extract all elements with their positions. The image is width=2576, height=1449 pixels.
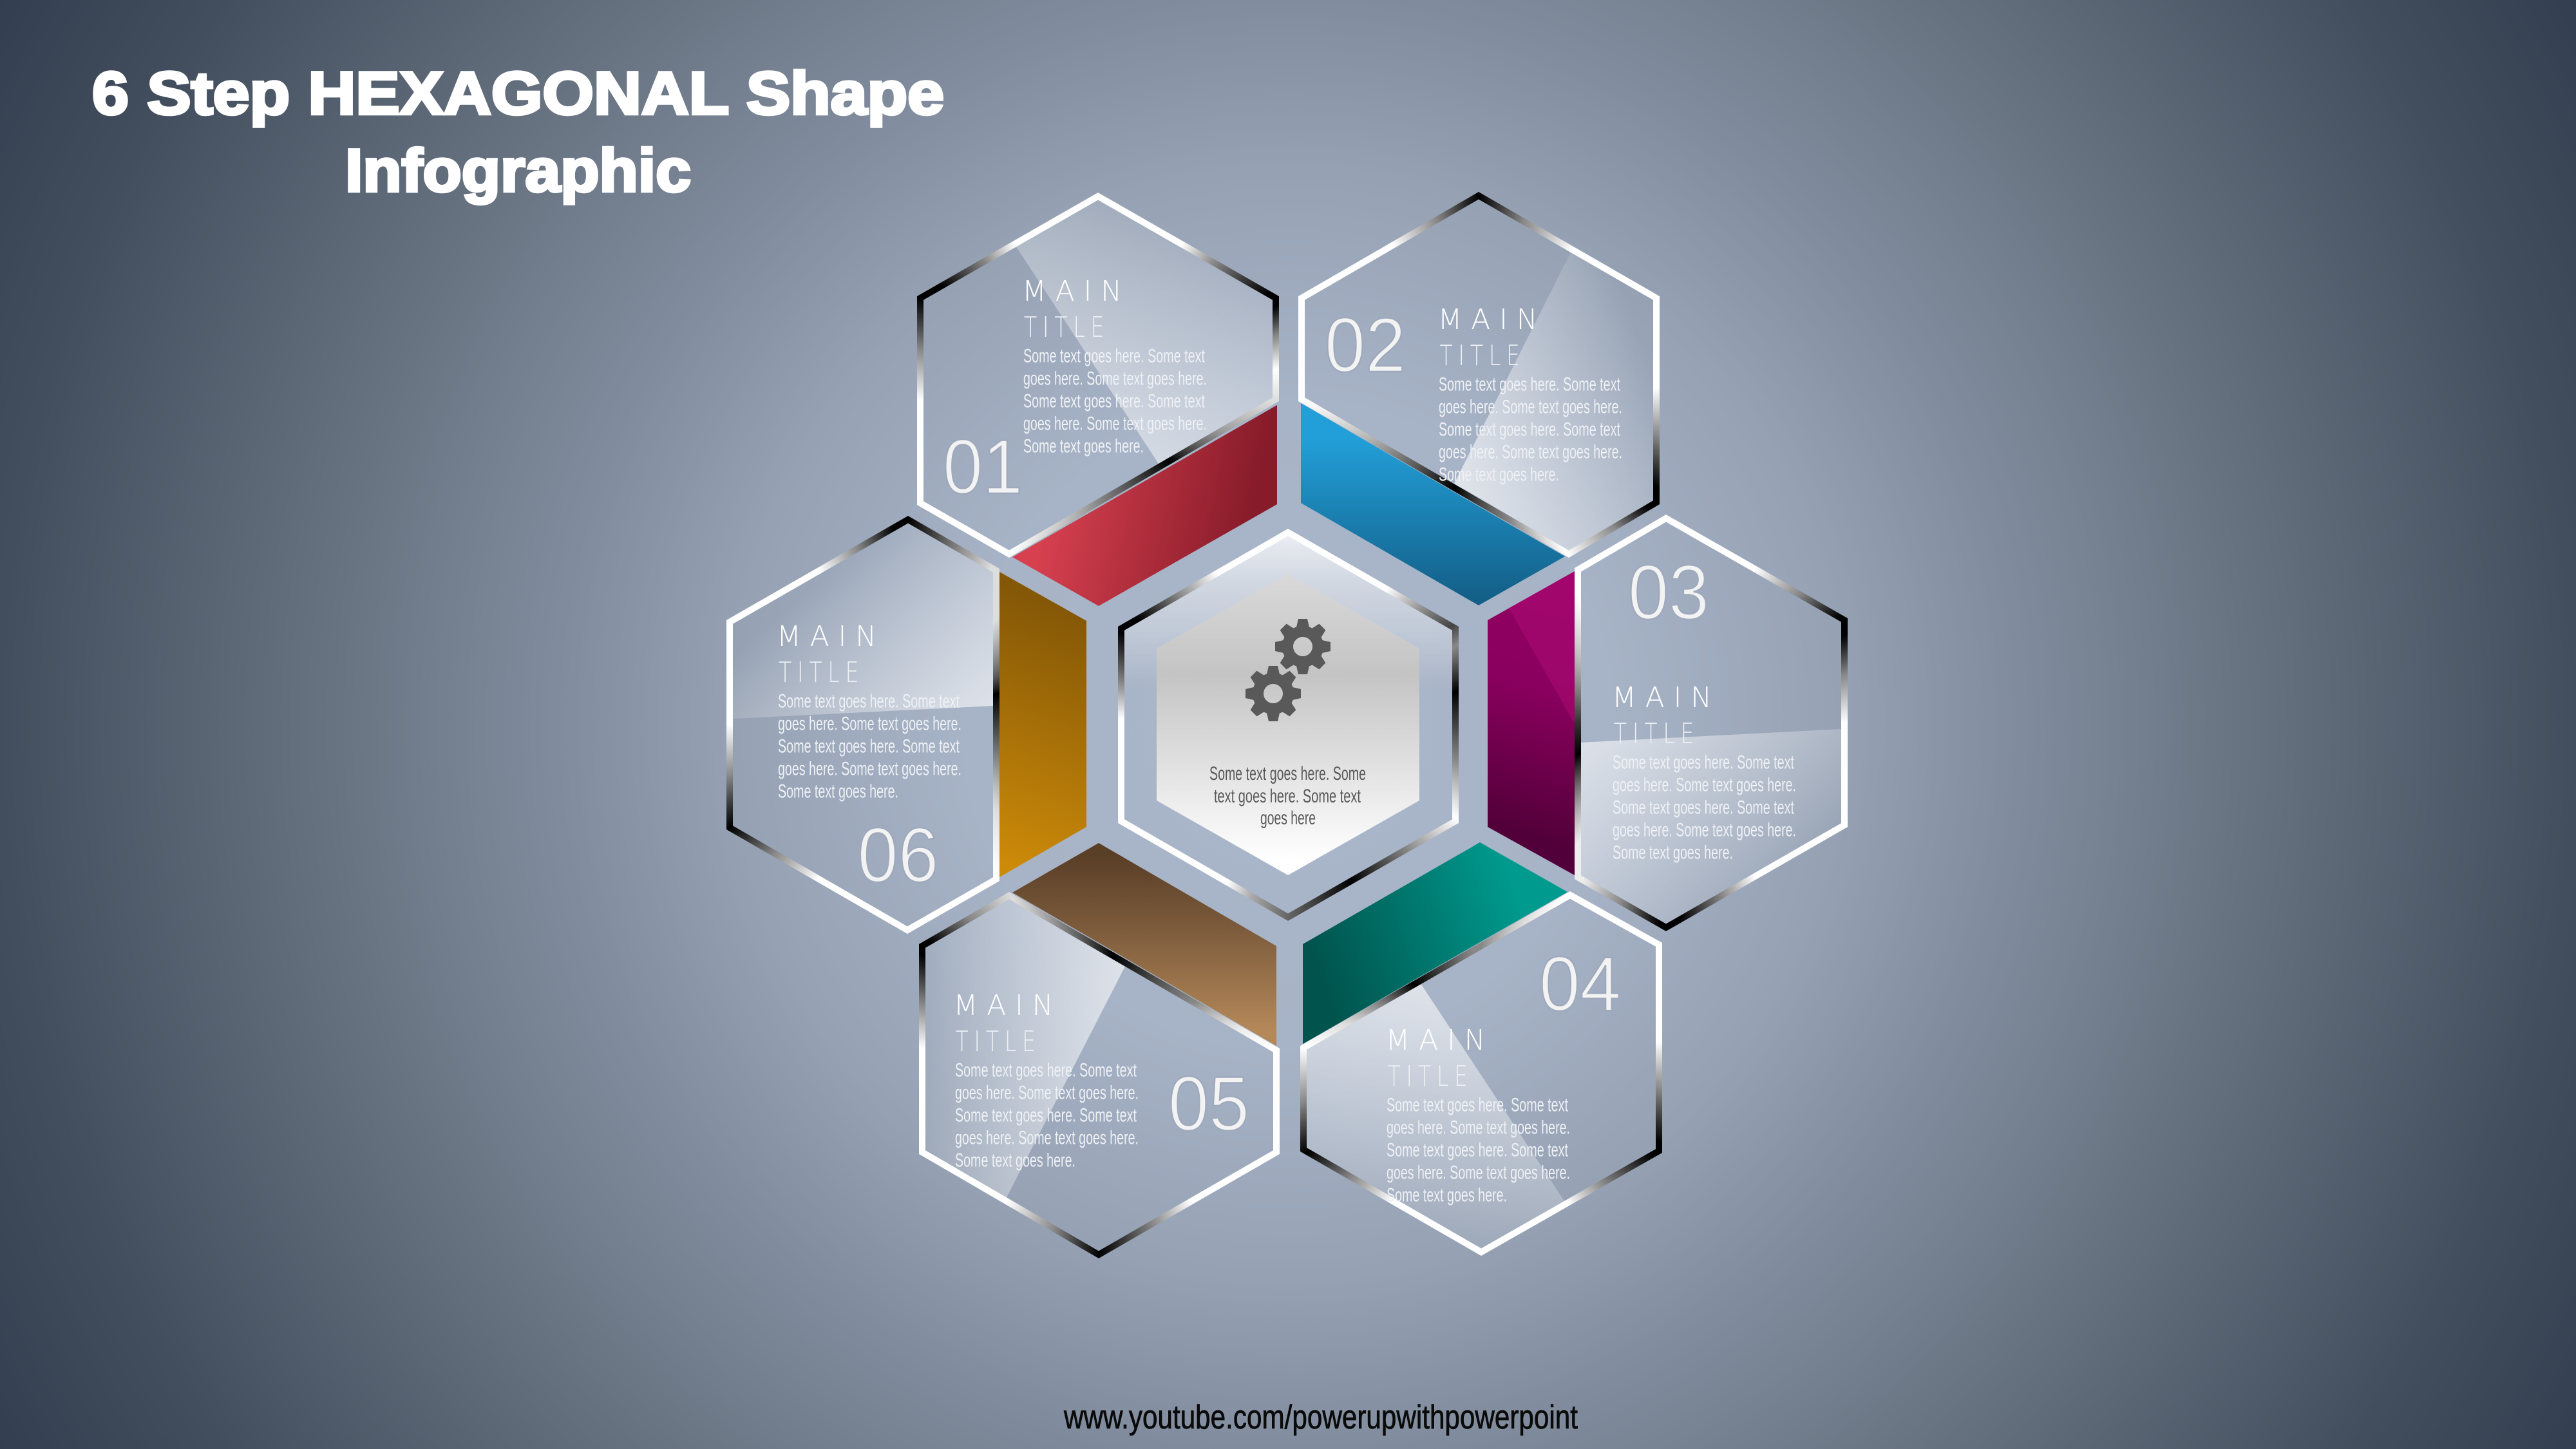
body text: goes here. Some text goes here. [778, 759, 961, 779]
body text: Some text goes here. Some text [1613, 797, 1794, 818]
icon: gears [1245, 619, 1331, 721]
panel: step 04 [1300, 891, 1662, 1256]
body text [1439, 374, 1622, 486]
body text: goes here. Some text goes here. [1439, 442, 1622, 462]
centre text: goes here [1260, 808, 1316, 829]
body text: goes here. Some text goes here. [1023, 413, 1207, 434]
body text: Some text goes here. Some text [1613, 752, 1794, 773]
body text: Some text goes here. Some text [778, 690, 960, 712]
metallic ring [726, 516, 999, 934]
body text: goes here. Some text goes here. [1387, 1117, 1570, 1139]
body text: Some text goes here. [1023, 435, 1144, 457]
body text: Some text goes here. Some text [1439, 374, 1620, 395]
body text: Some text goes here. [955, 1150, 1075, 1171]
centre text: text goes here. Some text [1214, 786, 1361, 807]
glass highlight [1454, 252, 1653, 550]
metallic ring [1298, 192, 1660, 558]
main title [1386, 1024, 1494, 1093]
main title: TITLE [1440, 339, 1526, 372]
body text: Some text goes here. Some text [1439, 419, 1620, 440]
main title: TITLE [1387, 1060, 1473, 1093]
body text [955, 1060, 1139, 1171]
main title: MAIN [1022, 275, 1131, 308]
body text [1023, 345, 1207, 457]
body text: Some text goes here. Some text [1387, 1140, 1568, 1160]
body text: Some text goes here. Some text [1387, 1095, 1568, 1115]
main title [1437, 303, 1546, 372]
number 04: 04 [1539, 941, 1621, 1027]
metallic ring [917, 193, 1279, 558]
band: brown [1012, 843, 1276, 1046]
band: magenta [1488, 571, 1575, 875]
body text: Some text goes here. Some text [955, 1060, 1137, 1081]
main title: MAIN [777, 620, 886, 653]
main title: MAIN [1612, 681, 1721, 714]
footer url: www.youtube.com/powerupwithpowerpoint [1063, 1399, 1578, 1436]
main title: TITLE [1614, 717, 1700, 750]
glass highlight [1581, 729, 1841, 923]
number 02: 02 [1325, 302, 1406, 388]
glass highlight [1016, 200, 1273, 464]
number 06: 06 [858, 812, 939, 898]
main title: TITLE [956, 1025, 1041, 1058]
panel: step 05 [919, 892, 1280, 1258]
body text: goes here. Some text goes here. [778, 714, 961, 734]
band: blue [1301, 403, 1565, 605]
body text: Some text goes here. Some text [778, 735, 960, 757]
main title: MAIN [953, 989, 1062, 1022]
number 05: 05 [1168, 1061, 1249, 1147]
panel: step 02 [1298, 192, 1660, 558]
main title: TITLE [1024, 311, 1110, 344]
body text: goes here. Some text goes here. [1613, 774, 1796, 796]
metallic ring [1118, 529, 1459, 921]
number 03: 03 [1628, 549, 1709, 636]
glass highlight [733, 523, 993, 719]
body text [1387, 1095, 1570, 1206]
glass highlight [1124, 536, 1452, 913]
body text: Some text goes here. [1387, 1185, 1507, 1206]
body text: goes here. Some text goes here. [955, 1127, 1139, 1149]
main title: MAIN [1437, 303, 1546, 336]
centre text: Some text goes here. Some [1209, 763, 1366, 784]
metallic ring [1300, 891, 1662, 1256]
body text: goes here. Some text goes here. [1023, 368, 1207, 389]
body text: Some text goes here. Some text [1023, 390, 1205, 412]
coloured connector bands [999, 403, 1575, 1046]
body text: Some text goes here. [1613, 842, 1733, 863]
body text: goes here. Some text goes here. [1387, 1162, 1570, 1184]
title: 6 Step HEXAGONAL Shape [92, 59, 944, 127]
body text [778, 690, 961, 802]
glass highlight [925, 899, 1125, 1197]
body text [1613, 752, 1796, 863]
panel: step 03 [1575, 515, 1848, 931]
body text: goes here. Some text goes here. [1613, 819, 1796, 841]
centre text [1209, 763, 1366, 829]
band: orange [999, 572, 1086, 877]
panel: step 06 [726, 516, 999, 934]
title [92, 59, 944, 206]
body text: goes here. Some text goes here. [955, 1082, 1139, 1104]
band: red [1012, 405, 1277, 606]
main title [1612, 681, 1721, 750]
band: teal [1303, 842, 1567, 1044]
main title: TITLE [779, 656, 864, 689]
inner white hexagon [1157, 574, 1419, 875]
panel: centre hexagon [1118, 529, 1459, 921]
body text: Some text goes here. [1439, 464, 1559, 486]
main title [777, 620, 886, 689]
body text: goes here. Some text goes here. [1439, 397, 1622, 417]
metallic ring [919, 892, 1280, 1258]
main title [1022, 275, 1131, 344]
main title: MAIN [1386, 1024, 1494, 1057]
body text: Some text goes here. Some text [955, 1105, 1137, 1126]
glass highlight [1307, 984, 1564, 1248]
panel: step 01 [917, 193, 1279, 558]
main title [953, 989, 1062, 1058]
number 01: 01 [943, 424, 1023, 510]
body text: Some text goes here. Some text [1023, 345, 1205, 367]
metallic ring [1575, 515, 1848, 931]
body text: Some text goes here. [778, 781, 898, 802]
title: Infographic [345, 137, 691, 204]
